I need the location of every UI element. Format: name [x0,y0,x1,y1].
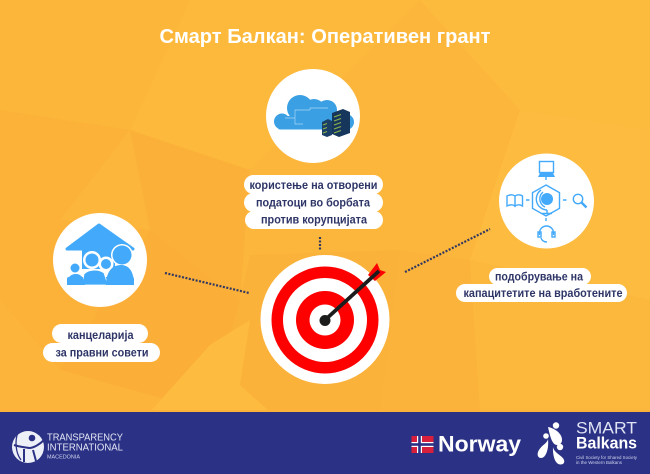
label pills: податоци во борбата [256,196,370,210]
label pills: подобрување на [495,270,583,284]
logo: Smart Balkans: Civil Society for Shared Society [576,455,638,460]
label pills: против корупцијата [261,212,367,226]
title: Смарт Балкан: Оперативен грант [160,25,490,48]
footer band [0,410,650,474]
panel: staff capacity [456,154,627,302]
target with arrow [260,255,390,384]
logo: Transparency International Macedonia: MACEDONIA [47,454,80,460]
logo: Transparency International Macedonia [12,431,123,463]
icon: Smart Balkans drops [538,422,564,464]
dotted connector: left [165,273,249,293]
label pills: капацитетите на вработените [464,286,623,300]
label pills: канцеларија [68,328,134,342]
label pills [456,268,627,302]
dotted connector: right [405,229,490,272]
label pills [43,324,160,362]
icon: house with people [53,213,147,307]
panel: legal advice office [43,213,160,362]
label pills: за правни совети [56,346,148,360]
logo: Smart Balkans: Balkans [576,434,637,452]
logo: Norway: Norway [438,432,521,456]
logo: Smart Balkans: in the Western Balkans [576,460,623,465]
dotted connector: top [319,237,321,251]
label pills [244,175,383,229]
icon: globe network [499,154,594,248]
icon: cloud with servers [266,69,360,163]
panel: open data [244,69,383,229]
label pills: користење на отворени [250,178,378,192]
icon: Norwegian flag [412,436,434,453]
logo: Smart Balkans [538,418,638,465]
logo: Transparency International Macedonia: INTERNATIONAL [47,442,123,454]
logo: Transparency International Macedonia: TRANSPARENCY [47,432,123,444]
logo: Smart Balkans: SMART [576,418,637,438]
icon: arrow [320,263,386,326]
icon: TI emblem [12,431,44,463]
